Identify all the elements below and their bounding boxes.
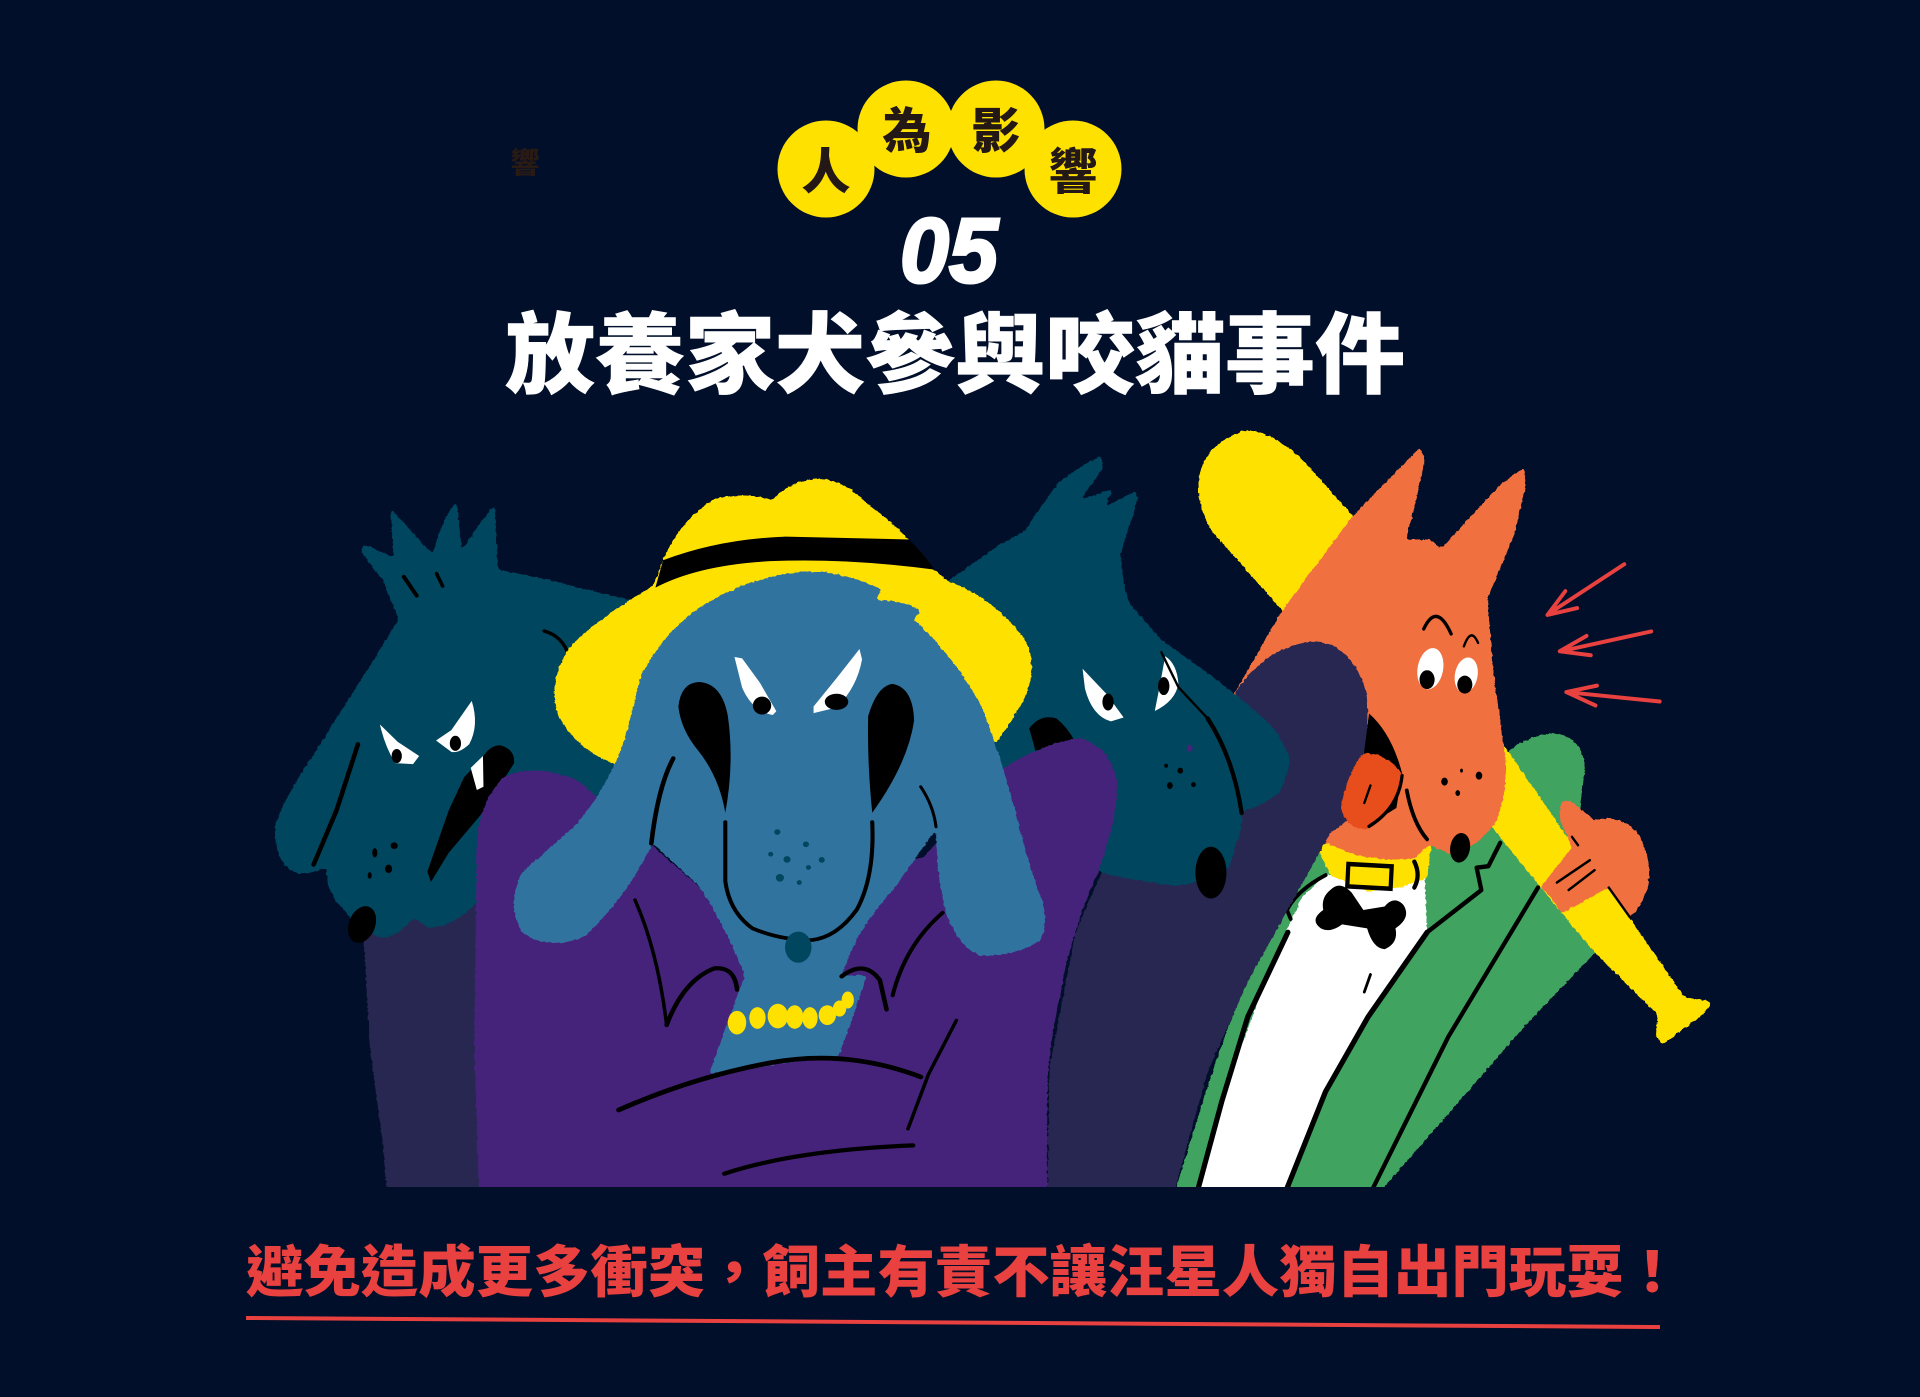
suit lines xyxy=(1198,843,1538,1188)
teal dog muzzle line and nose xyxy=(1029,652,1242,898)
number 05: 05 xyxy=(900,200,1000,302)
stray small character: 響 xyxy=(510,146,540,180)
white shirt xyxy=(1201,874,1428,1187)
bone bow tie xyxy=(1316,886,1406,949)
orange dog eyes xyxy=(1414,616,1481,695)
category badge: 人為影響: 影 xyxy=(971,105,1021,159)
tongue and open mouth xyxy=(1341,713,1427,839)
hat band xyxy=(655,537,934,588)
title: 放養家犬參與咬貓事件 xyxy=(505,306,1405,405)
baseball bat xyxy=(1198,430,1713,1044)
yellow hat xyxy=(554,478,1032,764)
category badge: 人為影響: 為 xyxy=(882,105,932,159)
hand on bat xyxy=(1540,801,1649,917)
freckles xyxy=(768,829,825,885)
snout outline xyxy=(725,822,873,940)
ear lines, nose and freckles xyxy=(314,573,568,946)
dog: teal dog on the left xyxy=(275,501,668,1235)
angry eyes xyxy=(734,649,862,715)
orange head xyxy=(1231,447,1526,863)
blue head, ears and neck xyxy=(514,572,1045,1074)
purple coat xyxy=(474,738,1117,1235)
illustration: four dogs xyxy=(275,430,1713,1235)
green suit xyxy=(1168,733,1596,1216)
dog: orange dog in green suit with bat xyxy=(1168,430,1713,1216)
alarm arrows xyxy=(1547,564,1660,706)
teal dog eyes xyxy=(380,701,475,764)
teal head xyxy=(275,501,668,938)
teal head xyxy=(929,456,1290,886)
dog: blue dog with hat in purple coat xyxy=(474,479,1117,1235)
collar with buckle xyxy=(1317,843,1432,892)
navy body xyxy=(364,903,480,1187)
orange dog freckles and nose xyxy=(1441,769,1482,864)
snarling mouth xyxy=(427,745,514,882)
dog: teal dog on the right xyxy=(929,456,1368,1216)
teal dog eyes xyxy=(1083,656,1178,721)
category badge: 人為影響: 人 xyxy=(801,146,851,200)
closing message: 避免造成更多衝突，飼主有責不讓汪星人獨自出門玩耍！ xyxy=(246,1241,1681,1304)
black inner ears xyxy=(678,682,914,813)
underline xyxy=(246,1316,1660,1329)
nose xyxy=(785,932,812,963)
yellow necklace xyxy=(728,992,854,1034)
category badge: 人為影響: 響 xyxy=(1048,146,1098,200)
category badge: 人為影響 xyxy=(778,80,1122,218)
navy body and arm xyxy=(1047,641,1368,1216)
coat and ear lines xyxy=(619,758,956,1174)
